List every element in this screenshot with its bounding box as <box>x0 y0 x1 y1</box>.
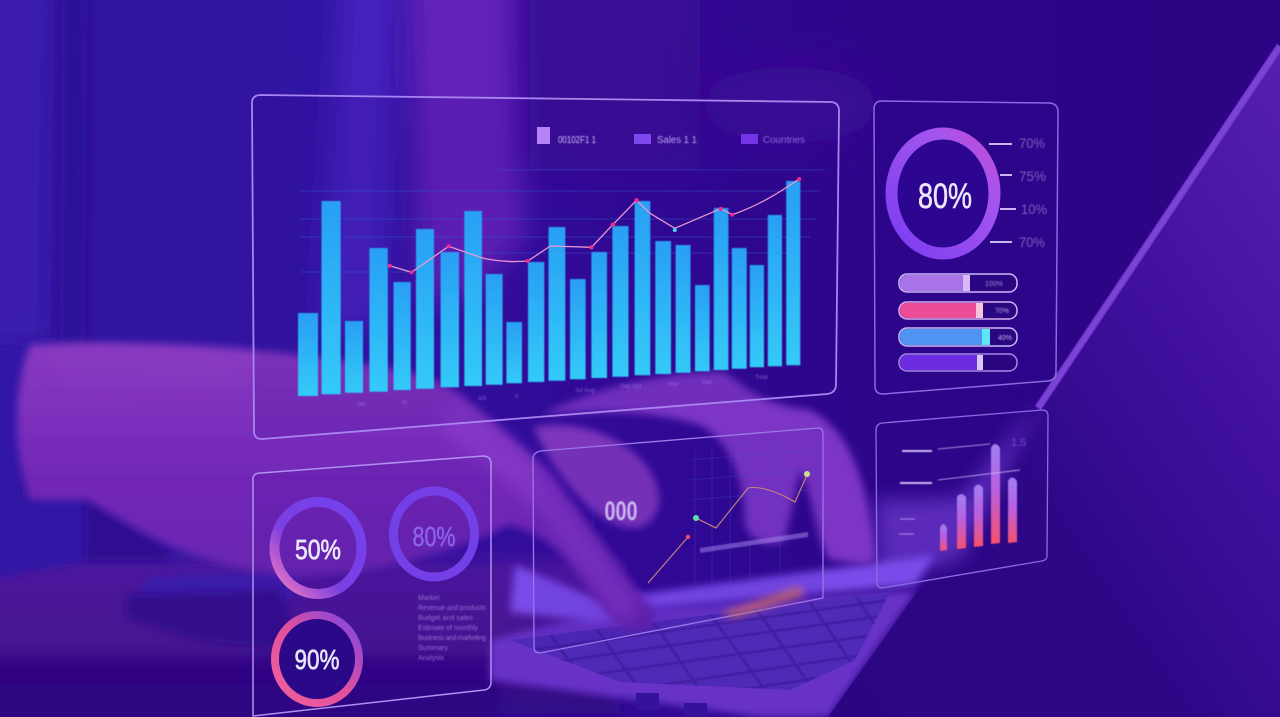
gauge scale labels: 75% <box>1019 168 1046 184</box>
gauge: 80% <box>892 134 994 254</box>
line series <box>648 471 810 583</box>
axis labels: Jan <box>356 402 366 408</box>
panel: line chart <box>533 428 823 653</box>
gauge: 80%: 80% <box>918 177 972 216</box>
donut: 80% <box>394 491 474 577</box>
axis labels: a/b <box>478 396 487 402</box>
chart legend: Sales 1 1 <box>657 135 697 146</box>
donut: 90% <box>275 615 359 703</box>
chart legend <box>537 127 805 146</box>
shirt cuff <box>0 338 85 590</box>
donut notes text: Summary <box>418 645 448 652</box>
axis labels: Sep Oct <box>620 384 642 390</box>
donut: 90%: 90% <box>294 644 340 675</box>
donut: 50%: 50% <box>295 534 341 565</box>
mini bars <box>940 444 1017 551</box>
axis labels: Jul Aug <box>575 388 595 394</box>
chart grid <box>593 440 810 630</box>
axis labels: Nov <box>668 382 679 388</box>
donut notes text <box>418 595 486 662</box>
keyboard rear light strip <box>510 555 935 622</box>
hand: left <box>17 343 655 630</box>
panel: donut gauges <box>253 456 491 716</box>
panel: mini bar chart <box>876 410 1048 588</box>
gauge scale labels <box>989 135 1047 250</box>
bars <box>298 181 800 396</box>
gauge scale labels: 70% <box>1019 234 1045 250</box>
trend line <box>388 177 801 274</box>
donut notes text: Business and marketing <box>418 635 486 642</box>
chart legend: Countries <box>763 135 805 146</box>
axis labels <box>356 375 768 408</box>
chart legend: 00102F1 1 <box>558 135 596 146</box>
donut notes text: Estimate of monthly <box>418 625 478 632</box>
panel: mini bar chart: 1.5 <box>1011 437 1026 449</box>
progress bars: 70% <box>995 308 1009 315</box>
hand: right fingers <box>540 372 876 564</box>
gauge scale labels: 70% <box>1019 135 1045 151</box>
axis labels: Total <box>755 375 768 381</box>
axis labels: Dec <box>702 380 713 386</box>
mini chart labels <box>899 444 1020 534</box>
progress bars <box>899 274 1017 371</box>
table <box>0 560 620 717</box>
donut: 80%: 80% <box>412 521 456 552</box>
axis labels: m <box>402 400 407 406</box>
grid lines <box>300 170 825 272</box>
donut notes text: Analysis <box>418 655 444 662</box>
axis labels: h <box>515 394 518 400</box>
donut notes text: Revenue and products <box>418 605 486 612</box>
gauge scale labels: 10% <box>1021 201 1047 217</box>
progress bars: 40% <box>998 335 1012 342</box>
donut: 50% <box>274 502 362 594</box>
progress bars: 100% <box>985 281 1003 288</box>
panel: main bar chart <box>252 95 839 439</box>
donut notes text: Market <box>418 595 439 602</box>
donut notes text: Budget and sales <box>418 615 474 622</box>
reflected heatmap <box>720 586 805 618</box>
keyboard keys <box>510 592 890 690</box>
laptop screen <box>828 48 1280 717</box>
panel: gauge and progress bars <box>874 101 1058 394</box>
laptop deck <box>490 590 917 717</box>
figure: 000: 000 <box>604 496 638 526</box>
